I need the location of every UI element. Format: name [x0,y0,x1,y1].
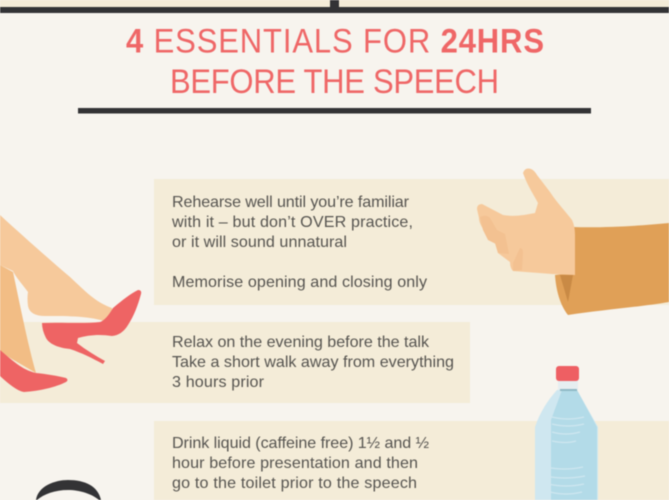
icon: dark arc at bottom left [36,480,101,500]
panel: rehearse: Memorise opening and closing only [172,273,428,291]
panel: drink: Drink liquid (caffeine free) 1½ and ½ [172,434,429,452]
panel: drink [154,421,669,500]
title: BEFORE THE SPEECH [170,63,499,100]
panel: relax: 3 hours prior [172,373,265,391]
panel: rehearse [154,179,669,305]
title [126,22,544,100]
title: 4 ESSENTIALS FOR 24HRS [126,22,544,60]
panel: relax [0,322,470,403]
top band with divider [0,0,669,13]
icon: crossed legs with red heels [0,215,141,392]
icon: water bottle [535,366,598,500]
panel: relax: Take a short walk away from everything [172,353,454,371]
panel: rehearse: with it – but don’t OVER practice, [171,213,413,231]
panel: relax: Relax on the evening before the talk [172,333,430,351]
panel: drink: go to the toilet prior to the speech [172,474,417,492]
title underline [78,108,591,114]
panel: drink: hour before presentation and then [172,454,418,472]
panel: rehearse: Rehearse well until you’re familiar [172,193,410,211]
panel: rehearse: or it will sound unnatural [172,233,347,251]
icon: hand and sleeve [477,168,669,315]
